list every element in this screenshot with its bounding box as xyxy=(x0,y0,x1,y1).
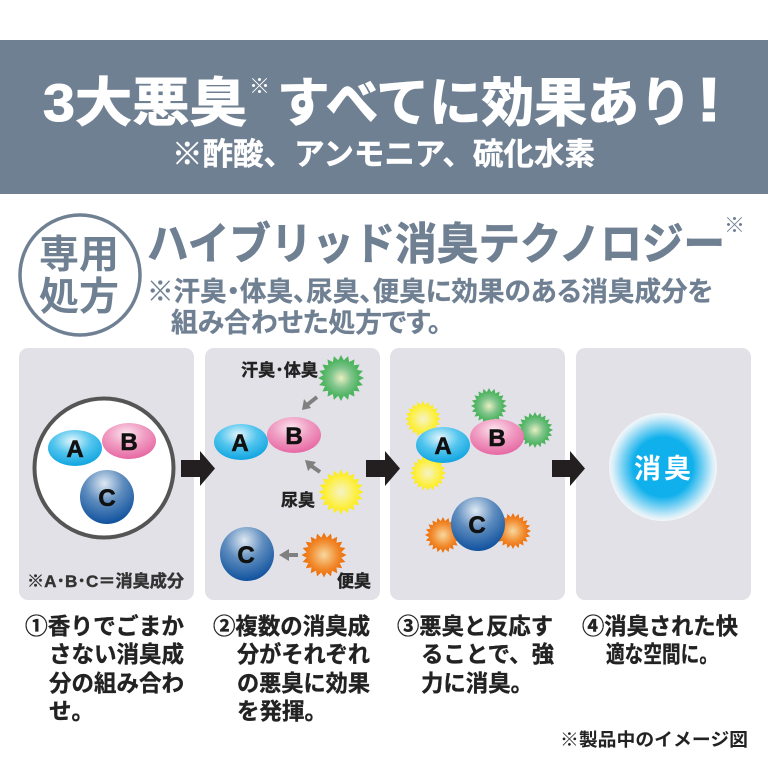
molecule C: C xyxy=(237,542,255,569)
small arrow to C xyxy=(279,549,298,561)
arrow: step 2 to 3 xyxy=(366,451,400,486)
small arrow to B from below xyxy=(305,460,320,472)
technology description: ※汗臭・体臭、尿臭、便臭に効果のある消臭成分を xyxy=(147,277,713,307)
subheading: three odours: ※酢酸、アンモニア、硫化水素 xyxy=(172,137,595,172)
caption 1 xyxy=(25,613,184,724)
molecule A: A xyxy=(231,430,249,457)
bound odours xyxy=(405,388,553,553)
odour: faeces: 便臭 xyxy=(337,572,371,591)
molecule A xyxy=(48,430,102,466)
caption 1: ①香りでごまか xyxy=(25,613,184,639)
odour: sweat and body xyxy=(241,355,364,401)
molecule C: C xyxy=(98,485,116,512)
molecule C xyxy=(220,527,274,581)
badge: dedicated formula: 専用 xyxy=(39,234,119,277)
main heading: 3大悪臭 xyxy=(43,74,247,133)
odour: sweat and body: 汗臭･体臭 xyxy=(241,361,318,380)
panel 2: each ingredient targets odours xyxy=(205,348,380,600)
molecule B xyxy=(267,417,321,453)
technology heading: ※ xyxy=(724,215,745,237)
molecule A xyxy=(214,424,268,460)
main heading: ※ xyxy=(249,76,270,98)
deodorised orb xyxy=(609,413,717,521)
odour: urine xyxy=(281,470,364,514)
molecule A: A xyxy=(66,436,84,463)
molecule C xyxy=(451,497,505,551)
main heading: すべてに効果あり xyxy=(277,74,692,133)
caption 4: 適な空間に。 xyxy=(606,641,718,667)
arrow: step 3 to 4 xyxy=(552,451,585,486)
caption 1: さない消臭成 xyxy=(49,641,184,667)
panel 3: reaction xyxy=(390,348,565,600)
technology description: 組み合わせた処方です。 xyxy=(171,308,441,338)
main heading: ! xyxy=(696,66,722,135)
main heading xyxy=(43,66,722,135)
caption 2: 分がそれぞれ xyxy=(237,641,370,667)
technology heading: ハイブリッド消臭テクノロジー xyxy=(147,220,725,269)
caption 2: を発揮。 xyxy=(237,698,327,724)
molecule C: C xyxy=(468,512,486,539)
panel 1: ingredients xyxy=(19,348,194,600)
caption 4: ④消臭された快 xyxy=(582,613,738,639)
molecule B: B xyxy=(488,425,506,452)
molecule B: B xyxy=(120,429,138,456)
technology description xyxy=(147,277,713,338)
caption 2: ②複数の消臭成 xyxy=(213,613,370,639)
odour: urine: 尿臭 xyxy=(281,491,315,510)
molecule A: A xyxy=(434,433,452,460)
badge: dedicated formula xyxy=(20,215,140,335)
caption 3 xyxy=(397,613,554,696)
arrow: step 1 to 2 xyxy=(181,451,215,486)
molecule B: B xyxy=(285,423,303,450)
caption 4 xyxy=(582,613,738,667)
molecule B xyxy=(102,423,156,459)
caption 3: ③悪臭と反応す xyxy=(397,613,553,639)
odour: faeces xyxy=(302,532,371,591)
deodorised orb: 消臭 xyxy=(634,454,691,484)
badge: dedicated formula: 処方 xyxy=(39,276,119,319)
caption 2: の悪臭に効果 xyxy=(237,670,370,696)
footnote: ※製品中のイメージ図 xyxy=(560,730,748,750)
small arrow to B from above xyxy=(302,397,317,410)
molecule C xyxy=(80,470,134,524)
molecule B xyxy=(470,419,524,455)
caption 3: 力に消臭。 xyxy=(421,670,533,696)
panel 4: deodorised xyxy=(576,348,751,600)
caption 3: ることで、強 xyxy=(421,641,554,667)
caption 2 xyxy=(213,613,370,724)
ingredient note: ※A･B･C＝消臭成分 xyxy=(27,571,184,591)
caption 1: せ。 xyxy=(49,698,94,724)
caption 1: 分の組み合わ xyxy=(49,670,184,696)
molecule A xyxy=(416,427,470,463)
header band xyxy=(0,40,768,194)
